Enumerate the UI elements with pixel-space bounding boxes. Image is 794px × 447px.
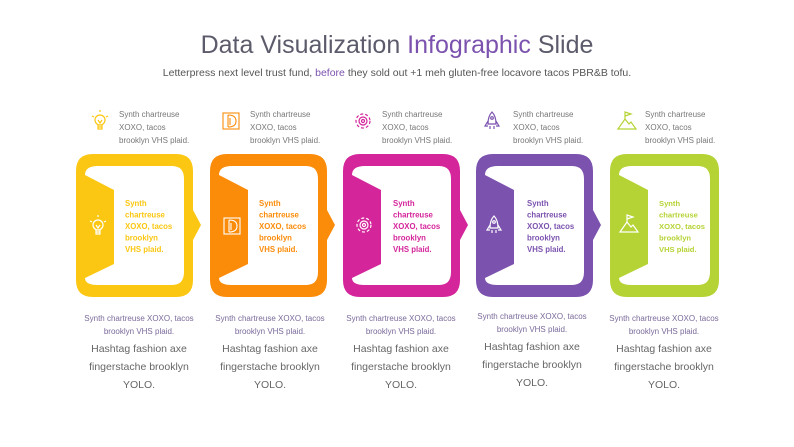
icon: rocket in card (487, 216, 501, 233)
caption top 3: Synth chartreuse (382, 110, 443, 119)
card 2 (210, 154, 335, 297)
caption top 5: brooklyn VHS plaid. (645, 136, 715, 145)
bottom text 5: YOLO. (648, 379, 680, 391)
caption top 2: XOXO, tacos (250, 123, 297, 132)
subtitle: Letterpress next level trust fund, before they sold out +1 meh gluten-free locavore tacos PBR&B tofu. (163, 67, 631, 79)
bottom text 1: fingerstache brooklyn (89, 361, 189, 373)
card text 5: brooklyn (659, 234, 691, 242)
card text 2: XOXO, tacos (259, 222, 307, 231)
bottom text 2: YOLO. (254, 379, 286, 391)
card text 4: chartreuse (527, 210, 568, 220)
bottom text 3: brooklyn VHS plaid. (366, 327, 436, 336)
step 1 yellow (76, 110, 201, 297)
title: Data Visualization Infographic Slide (201, 31, 593, 59)
bottom text 2: Synth chartreuse XOXO, tacos (215, 314, 325, 323)
icon: pen in card (224, 218, 240, 234)
caption top 3: brooklyn VHS plaid. (382, 136, 452, 145)
card text 3: VHS plaid. (393, 245, 432, 254)
caption top 1: XOXO, tacos (119, 123, 166, 132)
bottom text 5: brooklyn VHS plaid. (629, 327, 699, 336)
bottom text 4: Hashtag fashion axe (484, 341, 580, 353)
caption top 4: XOXO, tacos (513, 123, 560, 132)
card text 5: XOXO, tacos (659, 222, 705, 231)
card text 2: brooklyn (259, 234, 292, 242)
caption top 4: brooklyn VHS plaid. (513, 136, 583, 145)
card text 3: chartreuse (393, 210, 434, 220)
card text 2: Synth (259, 199, 281, 208)
caption top 5: Synth chartreuse (645, 110, 706, 119)
bottom text 2: fingerstache brooklyn (220, 361, 320, 373)
step 5 green (610, 110, 719, 297)
bottom text 4: YOLO. (516, 377, 548, 389)
card 5 (610, 154, 719, 297)
card 4 (476, 154, 601, 297)
step 2 orange (210, 110, 335, 297)
icon: flag in card (620, 215, 638, 232)
bottom text 1: Synth chartreuse XOXO, tacos (84, 314, 194, 323)
bottom text 5: fingerstache brooklyn (614, 361, 714, 373)
bottom text 4: brooklyn VHS plaid. (497, 325, 567, 334)
card text 1: VHS plaid. (125, 245, 164, 254)
card 1 (76, 154, 201, 297)
card text 3: XOXO, tacos (393, 222, 441, 231)
bottom text 1: YOLO. (123, 379, 155, 391)
bottom text 3: Hashtag fashion axe (353, 343, 449, 355)
bottom text 5 (609, 314, 719, 391)
card 3 (343, 154, 468, 297)
bottom text 2: brooklyn VHS plaid. (235, 327, 305, 336)
bottom text 4: fingerstache brooklyn (482, 359, 582, 371)
icon: gear top (356, 114, 370, 128)
card text 4: Synth (527, 199, 549, 208)
caption top 2: Synth chartreuse (250, 110, 311, 119)
card text 4: VHS plaid. (527, 245, 566, 254)
icon: flag top (618, 112, 636, 129)
icon: rocket top (485, 112, 499, 129)
bottom text 4: Synth chartreuse XOXO, tacos (477, 312, 587, 321)
bottom text 5: Hashtag fashion axe (616, 343, 712, 355)
caption top 1: brooklyn VHS plaid. (119, 136, 189, 145)
bottom text 1: brooklyn VHS plaid. (104, 327, 174, 336)
card text 2: VHS plaid. (259, 245, 298, 254)
caption top 5: XOXO, tacos (645, 123, 692, 132)
card text 1: Synth (125, 199, 147, 208)
step 4 purple (476, 110, 601, 297)
icon: gear in card (357, 218, 371, 232)
caption top 4: Synth chartreuse (513, 110, 574, 119)
bottom text 5: Synth chartreuse XOXO, tacos (609, 314, 719, 323)
card text 5: chartreuse (659, 210, 698, 220)
caption top 1: Synth chartreuse (119, 110, 180, 119)
caption top 3: XOXO, tacos (382, 123, 429, 132)
bottom text 2 (215, 314, 325, 391)
bottom text 4 (477, 312, 587, 389)
bottom text 3: fingerstache brooklyn (351, 361, 451, 373)
icon: pen top (223, 113, 239, 129)
card text 3: brooklyn (393, 234, 426, 242)
bottom text 3 (346, 314, 456, 391)
card text 5: Synth (659, 199, 680, 208)
caption top 2: brooklyn VHS plaid. (250, 136, 320, 145)
bottom text 1 (84, 314, 194, 391)
card text 4: XOXO, tacos (527, 222, 575, 231)
card text 3: Synth (393, 199, 415, 208)
card text 1: brooklyn (125, 234, 158, 242)
bottom text 2: Hashtag fashion axe (222, 343, 318, 355)
bottom text 3: Synth chartreuse XOXO, tacos (346, 314, 456, 323)
bottom text 1: Hashtag fashion axe (91, 343, 187, 355)
step 3 magenta (343, 110, 468, 297)
card text 4: brooklyn (527, 234, 560, 242)
card text 5: VHS plaid. (659, 245, 697, 254)
bottom text 3: YOLO. (385, 379, 417, 391)
card text 1: chartreuse (125, 210, 166, 220)
card text 2: chartreuse (259, 210, 300, 220)
icon: bulb top (92, 110, 108, 129)
card text 1: XOXO, tacos (125, 222, 173, 231)
icon: bulb in card (90, 215, 106, 234)
